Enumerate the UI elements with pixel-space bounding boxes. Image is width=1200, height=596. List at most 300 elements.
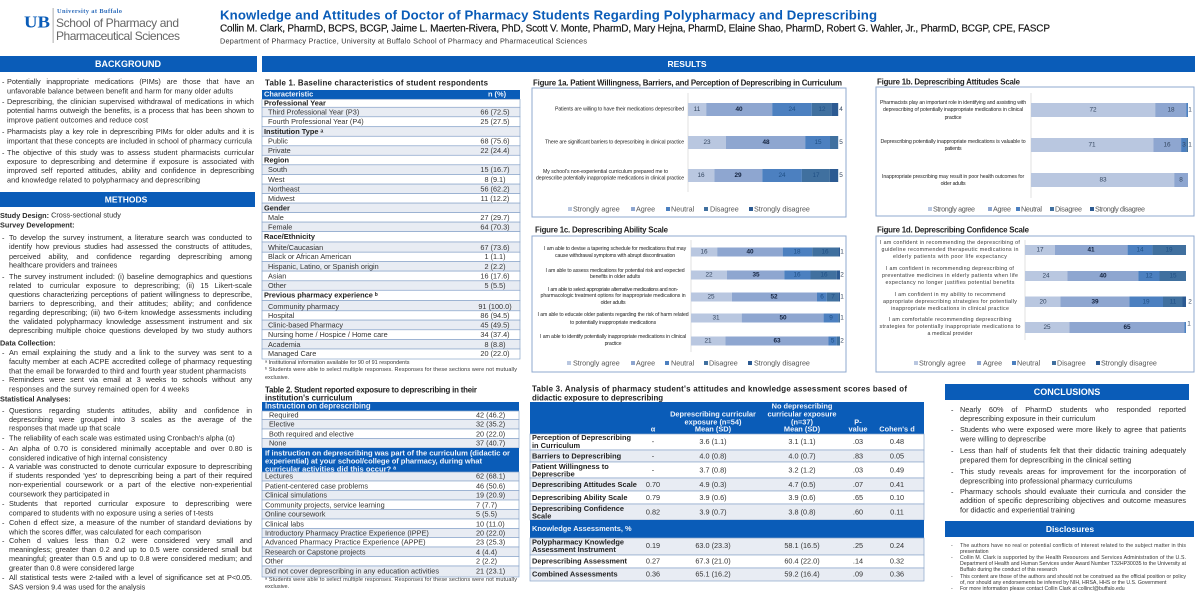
table 2: exposure to deprescribing: ᵃ Students were able to select multiple responses. Responses for these sections were not mutually — [265, 577, 517, 583]
logo: University at Buffalo School of Pharmacy: Pharmaceutical Sciences — [56, 29, 180, 43]
chart: figure 1b — [876, 78, 1194, 216]
table 2: exposure to deprescribing: Clinical simulations — [265, 490, 327, 500]
table 1: baseline characteristics: Institution Type ᵃ — [264, 127, 324, 136]
panel: conclusions: - — [951, 446, 954, 456]
table 3: analysis of scores: .25 — [853, 541, 863, 550]
table 3: analysis of scores: value — [849, 424, 867, 434]
chart: figure 1d: I am comfortable recommending deprescribing — [888, 317, 1012, 323]
table 2: exposure to deprescribing: Lectures — [265, 472, 293, 480]
panel: methods: - — [2, 444, 5, 454]
chart: figure 1d: Strongly agree — [919, 358, 966, 368]
panel: methods: coursework they participated in — [9, 490, 110, 498]
chart: figure 1c: benefits in older adults — [590, 274, 641, 280]
panel: background: Potentially inappropriate medications (PIMs) are those that have an — [7, 77, 254, 86]
chart: figure 1b: Neutral — [1021, 204, 1042, 214]
panel: methods: - — [2, 406, 5, 416]
panel: conclusions: Students who were exposed were more likely to agree that patients — [960, 425, 1186, 434]
table 3: analysis of scores: - — [652, 437, 655, 446]
panel: conclusions: - — [951, 468, 954, 476]
panel: methods: - — [2, 348, 5, 358]
table 2: exposure to deprescribing: 7 (7.7) — [476, 500, 497, 510]
table 1: baseline characteristics: West — [268, 175, 284, 184]
table 2: exposure to deprescribing: Required — [269, 410, 299, 420]
chart: figure 1b: 3 — [1182, 142, 1186, 148]
table 1: baseline characteristics: 20 (22.0) — [480, 349, 510, 358]
panel: methods: barriers to deprescribing, and their attitudes; ability; and confidence — [9, 299, 252, 308]
table 3: analysis of scores: 67.3 (21.0) — [695, 556, 731, 566]
panel: methods: considered indicative of high internal consistency — [9, 454, 168, 462]
chart: figure 1a: deprescribe potentially inappropriate medications in clinical practice — [536, 176, 684, 182]
panel: methods: - — [2, 536, 5, 546]
table 2: exposure to deprescribing — [262, 386, 519, 590]
panel: methods: - — [2, 376, 5, 384]
chart: figure 1d: Strongly disagree — [1101, 358, 1157, 368]
panel: background: potential harms outweigh the benefits, is a process that has been shown to — [7, 106, 254, 115]
panel: conclusions: for didactic and experiential training — [960, 506, 1075, 514]
table 3: analysis of scores: 0.19 — [646, 541, 660, 550]
panel: methods: - — [2, 272, 5, 282]
panel: disclosures: presentation — [960, 549, 989, 555]
chart: figure 1a: 24 — [778, 172, 786, 179]
table 2: exposure to deprescribing: Advanced Pharmacy Practice Experience (APPE) — [265, 538, 426, 546]
table 3: analysis of scores: Table 3. Analysis of pharmacy student's attitudes and knowledge assessment scores based of — [532, 384, 907, 394]
panel: methods: responses that made up that scale — [9, 424, 121, 432]
chart: figure 1b: 83 — [1099, 176, 1107, 184]
table 2: exposure to deprescribing: 46 (50.6) — [476, 482, 505, 490]
table 2: exposure to deprescribing: Instruction on deprescribing — [265, 402, 371, 410]
panel: background: - — [2, 128, 5, 136]
panel: methods: Questions regarding students attitudes, ability and confidence in — [9, 406, 252, 415]
chart: figure 1d: 19 — [1165, 246, 1173, 254]
table 1: baseline characteristics: ᵇ Students were able to select multiple responses. Responses for these sections were not mutually — [265, 366, 517, 373]
chart: figure 1c: I am able to select appropriate alternative medications and non- — [548, 287, 678, 293]
table 1: baseline characteristics: 66 (72.5) — [480, 108, 510, 116]
panel: methods: if students responded 'yes' to deprescribing being a part of their required — [9, 471, 252, 480]
panel: methods: - — [2, 434, 5, 442]
panel: methods: identify how previous studies had assessed the constructs of attitudes, — [9, 242, 252, 251]
table 1: baseline characteristics: 5 (5.5) — [484, 281, 506, 290]
table 3: analysis of scores: Perception of Deprescribing — [532, 433, 631, 442]
table 2: exposure to deprescribing: 10 (11.0) — [476, 520, 505, 528]
heading: results: RESULTS — [667, 59, 707, 69]
table 2: exposure to deprescribing: 42 (46.2) — [476, 410, 505, 420]
chart: figure 1d: 1 — [1187, 320, 1191, 328]
table 1: baseline characteristics: White/Caucasian — [268, 243, 323, 252]
chart: figure 1b: Figure 1b. Deprescribing Attitudes Scale — [877, 78, 1021, 86]
panel: methods: deprescribing multiple choice questions developed by two study authors — [9, 326, 252, 335]
table 3: analysis of scores: 0.48 — [890, 437, 904, 446]
chart: figure 1a: 5 — [839, 172, 843, 179]
chart: figure 1c: older adults — [601, 300, 626, 306]
panel: methods: Cohen d effect size, a measure of the number of standard deviations by — [9, 518, 252, 527]
chart: figure 1a: Patients are willing to have their medications deprescribed — [555, 106, 684, 112]
table 3: analysis of scores: Deprescribe — [532, 470, 575, 478]
chart: figure 1c: Figure 1c. Deprescribing Ability Scale — [535, 226, 669, 234]
chart: figure 1b: 1 — [1188, 106, 1192, 114]
panel: methods: the validated polypharmacy knowledge assessment instrument and six — [9, 317, 252, 326]
chart: figure 1a: There are significant barriers to deprescribing in clinical practice — [545, 140, 684, 146]
table 1: baseline characteristics: Male — [268, 213, 284, 222]
panel: background: improve patient outcomes and reduce cost — [7, 116, 148, 124]
chart: figure 1a: 23 — [703, 139, 711, 146]
chart: figure 1d: I am confident in my ability to recommend — [894, 292, 1006, 298]
panel: disclosures: Department of Health and Human Services under Award Number T32HP30035 to the University at — [960, 561, 1187, 567]
panel: disclosures: Disclosures — [1046, 524, 1094, 534]
table 2: exposure to deprescribing: Did not cover deprescribing in any education activities — [265, 566, 439, 576]
panel: methods: faculty member at each ACPE accredited college of pharmacy requesting — [9, 357, 252, 366]
chart: figure 1a: Neutral — [671, 204, 695, 214]
table 1: baseline characteristics: Asian — [268, 272, 286, 280]
panel: disclosures: of, nor should any endorsements be inferred by NIH, HRSA, HHS or the U.S. Government — [960, 580, 1167, 586]
table 1: baseline characteristics: Clinic-based Pharmacy — [268, 320, 343, 330]
table 3: analysis of scores: Barriers to Deprescribing — [532, 452, 622, 460]
chart: figure 1c: 9 — [829, 314, 833, 322]
panel: disclosures: - — [951, 586, 953, 592]
table 1: baseline characteristics: exclusive. — [265, 375, 290, 381]
panel: methods: - — [2, 518, 5, 528]
table 1: baseline characteristics: Race/Ethnicity — [264, 232, 316, 241]
chart: figure 1b: Strongly disagree — [1095, 204, 1145, 214]
chart: figure 1d: 40 — [1099, 272, 1107, 280]
chart: figure 1d — [876, 226, 1194, 372]
panel: methods: - — [2, 234, 5, 242]
panel: methods: An email explaining the study and a link to the survey was sent to a — [9, 348, 252, 357]
chart: figure 1c: pharmacologic treatment options for inappropriate medications in — [540, 293, 686, 299]
panel: disclosures: The authors have no real or potential conflicts of interest related to the subject matter in this — [960, 543, 1186, 549]
table 3: analysis of scores: No deprescribing — [772, 402, 833, 410]
table 3: analysis of scores: Patient Willingness to — [532, 462, 609, 471]
table 3: analysis of scores: 63.0 (23.3) — [695, 541, 731, 550]
chart: figure 1d: elderly patients with poor life expectancy — [893, 254, 1007, 260]
table 3: analysis of scores: 0.11 — [890, 508, 904, 516]
panel: conclusions: prepared them for deprescribing in the clinical setting — [960, 456, 1131, 464]
table 2: exposure to deprescribing: Table 2. Student reported exposure to deprescribing in their — [265, 386, 477, 394]
chart: figure 1b: Pharmacists play an important role in identifying and assisting with — [880, 100, 1026, 106]
table 2: exposure to deprescribing: curricular activities did this occur? ᵃ — [265, 464, 396, 474]
chart: figure 1d: 41 — [1087, 246, 1095, 254]
chart: figure 1c: 31 — [712, 314, 720, 322]
logo: University at Buffalo School of Pharmacy — [24, 8, 180, 43]
table 3: analysis of scores: 4.7 (0.5) — [788, 480, 816, 489]
table 2: exposure to deprescribing: 5 (5.5) — [476, 510, 497, 518]
table 3: analysis of scores: 0.24 — [890, 541, 904, 550]
chart: figure 1c: to potentially inappropriate medications — [570, 320, 657, 326]
panel: methods: questions characterizing perceptions of patient willingness to deprescribe, — [9, 290, 252, 299]
panel: methods: deprescribing were grouped into 3 scales as the average of the — [9, 415, 252, 424]
chart: figure 1a: 15 — [814, 139, 822, 146]
chart: figure 1b: Strongly agree — [933, 204, 975, 214]
chart: figure 1b: Inappropriate prescribing may result in poor health outcomes for — [882, 174, 1024, 180]
chart: figure 1c: 40 — [746, 248, 754, 256]
logo: University at Buffalo School of Pharmacy: University at Buffalo — [57, 8, 122, 15]
chart: figure 1c: 35 — [752, 272, 760, 278]
table 1: baseline characteristics: Previous pharmacy experience ᵇ — [264, 290, 378, 300]
chart: figure 1d: 25 — [1043, 324, 1051, 331]
table 3: analysis of scores: Mean (SD) — [695, 424, 732, 434]
table 1: baseline characteristics: 11 (12.2) — [481, 194, 509, 203]
table 1: baseline characteristics: Third Professional Year (P3) — [268, 108, 359, 116]
table 2: exposure to deprescribing: None — [269, 438, 286, 448]
chart: figure 1b: Disagree — [1055, 204, 1082, 214]
table 3: analysis of scores: .60 — [853, 508, 863, 516]
table 3: analysis of scores: 3.1 (1.1) — [788, 437, 816, 446]
panel: methods: METHODS — [105, 194, 148, 204]
panel: background — [0, 56, 257, 184]
table 1: baseline characteristics: 64 (70.3) — [480, 222, 510, 232]
panel: conclusions: - — [951, 488, 954, 496]
panel: disclosures: - — [951, 543, 953, 549]
chart: figure 1c: 2 — [840, 338, 844, 344]
panel: methods: - — [2, 574, 5, 582]
table 1: baseline characteristics: Managed Care — [268, 349, 316, 358]
table 1: baseline characteristics: 25 (27.5) — [480, 117, 510, 126]
table 1: baseline characteristics: Region — [264, 156, 290, 164]
table 1: baseline characteristics: Black or African American — [268, 252, 351, 261]
table 3: analysis of scores: .83 — [853, 452, 863, 460]
table 3: analysis of scores: Mean (SD) — [784, 424, 821, 434]
panel: methods: perceived ability, and confidence regarding deprescribing among — [9, 252, 252, 261]
table 3: analysis of scores: 0.82 — [646, 508, 660, 516]
table 3: analysis of scores: 0.27 — [646, 556, 660, 566]
panel: methods: regarding deprescribing; (iii) two 6-item knowledge assessments including — [9, 308, 252, 317]
table 2: exposure to deprescribing: 19 (20.9) — [476, 490, 505, 500]
table 1: baseline characteristics: Academia — [268, 340, 301, 349]
chart: figure 1c: 21 — [704, 338, 712, 344]
table 3: analysis of scores: 4.0 (0.7) — [788, 452, 816, 460]
table 1: baseline characteristics: 34 (37.4) — [480, 330, 510, 339]
chart: figure 1b: Agree — [993, 204, 1011, 214]
panel: methods: Students that reported curricular exposure to deprescribing were — [9, 499, 252, 508]
panel: conclusions: addition of specific deprescribing objectives and outcome measures — [960, 496, 1186, 505]
chart: figure 1c: 1 — [840, 294, 844, 300]
title: Knowledge and Attitudes of Doctor of Pharmacy Students Regarding Polypharmacy and Deprescribing — [220, 8, 877, 22]
table 1: baseline characteristics: 8 (9.1) — [484, 175, 506, 184]
panel: background: and knowledge related to polypharmacy and deprescribing — [7, 176, 200, 184]
panel: background: improved self reported attitudes, ability and confidence in deprescribing — [7, 166, 254, 175]
panel: background: - — [2, 148, 5, 158]
table 2: exposure to deprescribing: 4 (4.4) — [476, 548, 497, 556]
chart: figure 1b: 1 — [1188, 142, 1192, 148]
chart: figure 1d: 20 — [1039, 298, 1047, 306]
panel: methods: meaningful; greater than 0.5 and up to 0.8 were considered medium; and — [9, 554, 252, 563]
chart: figure 1a: Figure 1a. Patient Willingness, Barriers, and Perception of Deprescribing in Curriculum — [533, 78, 842, 88]
panel: methods: The survey instrument included: (i) baseline demographics and questions — [9, 272, 252, 281]
chart: figure 1b: 8 — [1179, 176, 1183, 184]
table 3: analysis of scores: 0.79 — [646, 493, 660, 502]
chart: figure 1d: strategies for potentially inappropriate medications to — [880, 324, 1020, 330]
table 1: baseline characteristics: 22 (24.4) — [480, 146, 510, 155]
table 1: baseline characteristics: 86 (94.5) — [480, 311, 510, 320]
panel: conclusions: CONCLUSIONS — [1034, 387, 1100, 397]
table 3: analysis of scores: 0.49 — [890, 466, 904, 474]
chart: figure 1d: I am confident in recommending the deprescribing of — [880, 240, 1020, 246]
panel: methods: greater than 0.8 were considered large — [9, 564, 134, 572]
chart: figure 1c: 16 — [700, 248, 708, 256]
table 1: baseline characteristics: South — [268, 165, 287, 174]
table 1: baseline characteristics: Public — [268, 136, 288, 146]
table 3: analysis of scores: 0.05 — [890, 452, 904, 460]
chart: figure 1c: 52 — [770, 294, 778, 300]
table 3: analysis of scores: 0.36 — [646, 570, 660, 578]
table 2: exposure to deprescribing: Introductory Pharmacy Practice Experience (IPPE) — [265, 528, 429, 538]
panel: background: exposure to deprescribing and determine if exposure is associated with — [7, 157, 254, 166]
chart: figure 1c: 7 — [831, 294, 835, 300]
chart: figure 1c: I am able to educate older patients regarding the risk of harm related — [538, 312, 689, 318]
affiliation: Department of Pharmacy Practice, University at Buffalo School of Pharmacy and Pharmaceutical Sciences — [220, 36, 587, 46]
logo: University at Buffalo School of Pharmacy: School of Pharmacy and — [56, 16, 179, 30]
table 3: analysis of scores: 0.10 — [890, 493, 904, 502]
panel: methods — [0, 192, 255, 592]
table 3: analysis of scores: - — [652, 452, 655, 460]
table 1: baseline characteristics: ᵃ Institutional information available for 90 of 91 respondents — [265, 360, 410, 366]
chart: figure 1c: Strongly agree — [573, 358, 620, 368]
chart: figure 1c: cause withdrawal symptoms with abrupt discontinuation — [555, 253, 675, 259]
chart: figure 1a: 17 — [812, 172, 820, 179]
chart: figure 1d: Agree — [983, 358, 1002, 368]
table 1: baseline characteristics: 1 (1.1) — [484, 252, 506, 261]
table 3: analysis of scores: curricular exposure — [767, 410, 837, 418]
chart: figure 1d: appropriate deprescribing strategies for potentially — [883, 299, 1017, 305]
panel: conclusions: were willing to deprescribe — [959, 434, 1046, 444]
table 3: analysis of scores: .14 — [853, 556, 863, 566]
table 2: exposure to deprescribing: 23 (25.3) — [476, 538, 505, 546]
chart: figure 1b: 72 — [1089, 106, 1097, 114]
panel: conclusions: deprescribing into professional pharmacy curriculums — [960, 476, 1133, 486]
table 3: analysis of scores: .03 — [853, 437, 863, 446]
table 2: exposure to deprescribing: 2 (2.2) — [476, 556, 497, 566]
panel: methods: Survey Development: — [0, 220, 75, 230]
chart: figure 1c: 18 — [793, 248, 801, 256]
chart: figure 1b: Deprescribing potentially inappropriate medications is valuable to — [880, 139, 1026, 145]
chart: figure 1a: My school's non-experiential curriculum prepared me to — [543, 169, 668, 175]
panel: methods: responses and the survey remained open for 4 weeks — [9, 384, 189, 394]
table 3: analysis of scores: 3.7 (0.8) — [699, 466, 727, 474]
panel: conclusions: Less than half of students felt that their didactic training adequately — [960, 446, 1186, 455]
chart: figure 1c: Agree — [636, 358, 655, 368]
panel: methods: which the scores differ, was calculated for each comparison — [8, 528, 201, 536]
chart: figure 1b: patients — [945, 146, 962, 152]
chart: figure 1c: 25 — [707, 294, 715, 300]
table 3: analysis of scores: Deprescribing Attitudes Scale — [532, 480, 637, 489]
table 1: baseline characteristics: Table 1. Baseline characteristics of student respondents — [265, 78, 489, 88]
table 1: baseline characteristics: 45 (49.5) — [480, 320, 510, 330]
chart: figure 1a — [532, 78, 846, 217]
table 3: analysis of scores: 3.2 (1.2) — [788, 466, 816, 474]
table 2: exposure to deprescribing: exclusive. — [265, 584, 290, 590]
panel: background: important that these concepts are included in school of pharmacy curricula — [7, 136, 253, 146]
chart: figure 1d: 19 — [1142, 298, 1150, 306]
table 3: analysis of scores: 4.9 (0.3) — [699, 480, 727, 489]
panel: background: Deprescribing, the clinician supervised withdrawal of medications in which — [7, 97, 254, 106]
table 3: analysis of scores: 3.9 (0.6) — [699, 493, 727, 502]
panel: methods: Study Design: Cross-sectional study — [0, 210, 121, 220]
panel: disclosures — [945, 521, 1194, 592]
panel: methods: Data Collection: — [0, 338, 56, 348]
panel: disclosures: For more information please contact Collin Clark at collincl@buffalo.edu — [960, 586, 1125, 592]
table 3: analysis of scores: .03 — [853, 466, 863, 474]
table 3: analysis of scores: 0.70 — [646, 480, 660, 489]
table 3: analysis of scores: .07 — [853, 480, 863, 489]
table 1: baseline characteristics: Northeast — [268, 184, 300, 194]
chart: figure 1a: 40 — [735, 106, 743, 113]
table 3: analysis of scores: 0.41 — [890, 480, 904, 489]
panel: disclosures: Buffalo during the conduct of this research — [960, 567, 1057, 573]
chart: figure 1d: Neutral — [1017, 358, 1041, 368]
panel: methods: healthcare providers and trainees — [9, 260, 118, 270]
table 3: analysis of scores: Deprescribing curricular — [670, 410, 756, 418]
panel: methods: Statistical Analyses: — [0, 394, 71, 404]
chart: figure 1c — [532, 226, 846, 372]
table 3: analysis of scores: Combined Assessments — [532, 570, 618, 578]
table 1: baseline characteristics: 56 (62.2) — [480, 184, 510, 194]
panel: methods: Reminders were sent via email at 3 weeks to schools without any — [9, 375, 252, 384]
panel: background: unfavorable balance between benefit and harm for many older adults — [7, 86, 233, 96]
chart: figure 1c: 16 — [820, 272, 828, 278]
chart: figure 1a: 48 — [762, 139, 770, 146]
table 2: exposure to deprescribing: Research or Capstone projects — [265, 548, 366, 556]
table 3: analysis of scores: Deprescribing Assessment — [532, 556, 628, 566]
table 2: exposure to deprescribing: Elective — [269, 420, 295, 428]
table 3: analysis of scores: 0.32 — [890, 556, 904, 566]
chart: figure 1a: Strongly agree — [573, 204, 620, 214]
table 3: analysis of scores: exposure (n=54) — [685, 418, 742, 426]
panel: background: BACKGROUND — [95, 59, 161, 69]
chart: figure 1d: 24 — [1042, 272, 1050, 280]
chart: figure 1a: 16 — [697, 172, 705, 179]
table 3: analysis of scores: 60.4 (22.0) — [784, 556, 820, 566]
table 1: baseline characteristics: Nursing home / Hospice / Home care — [268, 330, 388, 339]
chart: figure 1c: 6 — [820, 294, 824, 300]
table 1: baseline characteristics: Fourth Professional Year (P4) — [268, 117, 364, 126]
chart: figure 1b: 18 — [1167, 106, 1175, 114]
table 2: exposure to deprescribing: Patient-centered case problems — [265, 482, 368, 490]
table 1: baseline characteristics: Other — [268, 281, 287, 290]
chart: figure 1d: 39 — [1091, 298, 1099, 306]
panel: conclusions: - — [951, 426, 954, 434]
chart: figure 1b: 16 — [1163, 142, 1171, 148]
panel: conclusions: This study reveals areas for improvement for the incorporation of — [960, 467, 1186, 476]
panel: disclosures: - — [951, 555, 953, 561]
chart: figure 1c: 63 — [773, 338, 781, 344]
table 3: analysis of scores: 3.9 (0.7) — [699, 508, 727, 516]
table 1: baseline characteristics — [262, 78, 520, 381]
chart: figure 1c: 50 — [779, 314, 787, 322]
chart: figure 1c: 2 — [840, 272, 844, 278]
table 2: exposure to deprescribing: 32 (35.2) — [476, 420, 505, 428]
chart: figure 1b: practice — [945, 115, 962, 121]
chart: figure 1c: I am able to identify potentially inappropriate medications in clinical — [540, 334, 686, 340]
chart: figure 1a: 11 — [694, 106, 701, 113]
panel: methods: that the email be forwarded to third and fourth year student pharmacists — [9, 366, 246, 376]
chart: figure 1b: 71 — [1088, 142, 1096, 148]
chart: figure 1a: 4 — [839, 106, 843, 113]
chart: figure 1d: 12 — [1145, 272, 1153, 280]
panel: conclusions: Nearly 60% of PharmD students who responded reported — [960, 405, 1186, 414]
chart: figure 1c: Neutral — [671, 358, 695, 368]
table 2: exposure to deprescribing: 20 (22.0) — [476, 430, 505, 438]
table 1: baseline characteristics: Characteristic — [264, 90, 313, 98]
panel: methods: compared to students with no exposure using a series of t-tests — [9, 508, 214, 518]
authors: Collin M. Clark, PharmD, BCPS, BCGP, Jaime L. Maerten-Rivera, PhD, Scott V. Monte, PharmD, Mary Hejna, PharmD, Elaine Shao, PharmD, Robert G. Wahler, Jr., PharmD, BCGP, CPE, FASCP — [220, 24, 1050, 34]
chart: figure 1c: 16 — [793, 272, 801, 278]
chart: figure 1b: older adults — [941, 181, 966, 187]
table 2: exposure to deprescribing: Other — [265, 556, 284, 566]
table 1: baseline characteristics: Female — [268, 222, 292, 232]
table 1: baseline characteristics: Community pharmacy — [268, 302, 339, 311]
table 3: analysis of scores: Knowledge Assessments, % — [532, 524, 632, 533]
table 2: exposure to deprescribing: Community projects, service learning — [265, 500, 385, 510]
chart: figure 1c: Disagree — [709, 358, 738, 368]
